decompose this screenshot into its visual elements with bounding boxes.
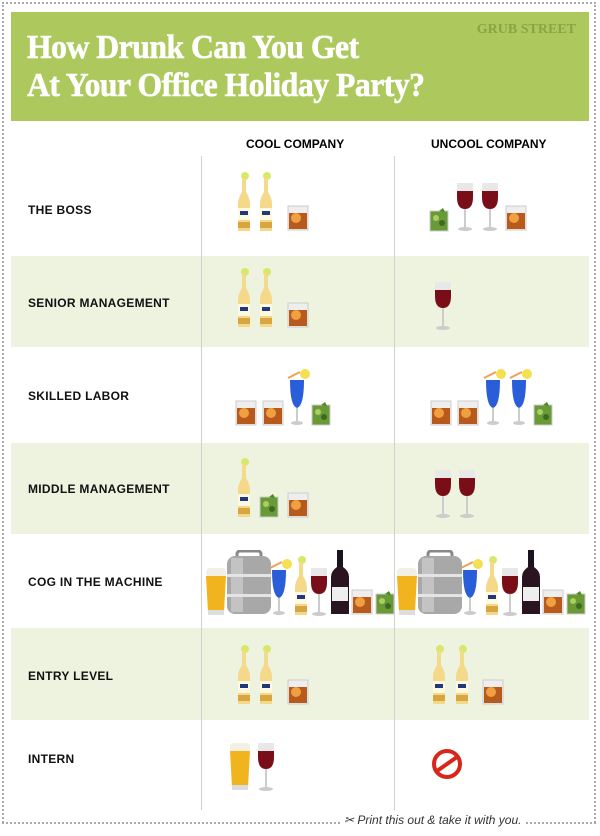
middle uncool xyxy=(435,470,475,518)
senior uncool xyxy=(435,282,451,330)
senior cool xyxy=(238,268,308,327)
row label: entry level: ENTRY LEVEL xyxy=(28,669,113,683)
cog uncool xyxy=(397,550,585,616)
title: How Drunk Can You Get xyxy=(27,29,359,66)
entry cool xyxy=(238,645,308,704)
boss cool xyxy=(238,172,308,231)
row label: middle management: MIDDLE MANAGEMENT xyxy=(28,482,170,496)
row label: senior management: SENIOR MANAGEMENT xyxy=(28,296,170,310)
column header: cool company: COOL COMPANY xyxy=(246,137,344,151)
intern cool xyxy=(230,743,274,791)
row label: cog in the machine: COG IN THE MACHINE xyxy=(28,575,163,589)
skilled cool xyxy=(236,369,330,425)
boss uncool xyxy=(430,183,526,231)
row label: intern: INTERN xyxy=(28,752,74,766)
entry uncool xyxy=(433,645,503,704)
row label: skilled labor: SKILLED LABOR xyxy=(28,389,129,403)
title xyxy=(27,29,425,104)
title banner xyxy=(11,12,589,121)
column header: uncool company: UNCOOL COMPANY xyxy=(431,137,547,151)
skilled uncool xyxy=(431,369,552,425)
cog cool xyxy=(206,550,394,616)
title: At Your Office Holiday Party? xyxy=(27,67,425,104)
row label: the boss: THE BOSS xyxy=(28,203,92,217)
icon: prohibited sign xyxy=(434,751,460,777)
logo: grub street: GRUB STREET xyxy=(477,22,576,37)
footer: print note: ✂ Print this out & take it with you. xyxy=(344,813,521,827)
middle cool xyxy=(238,458,308,517)
